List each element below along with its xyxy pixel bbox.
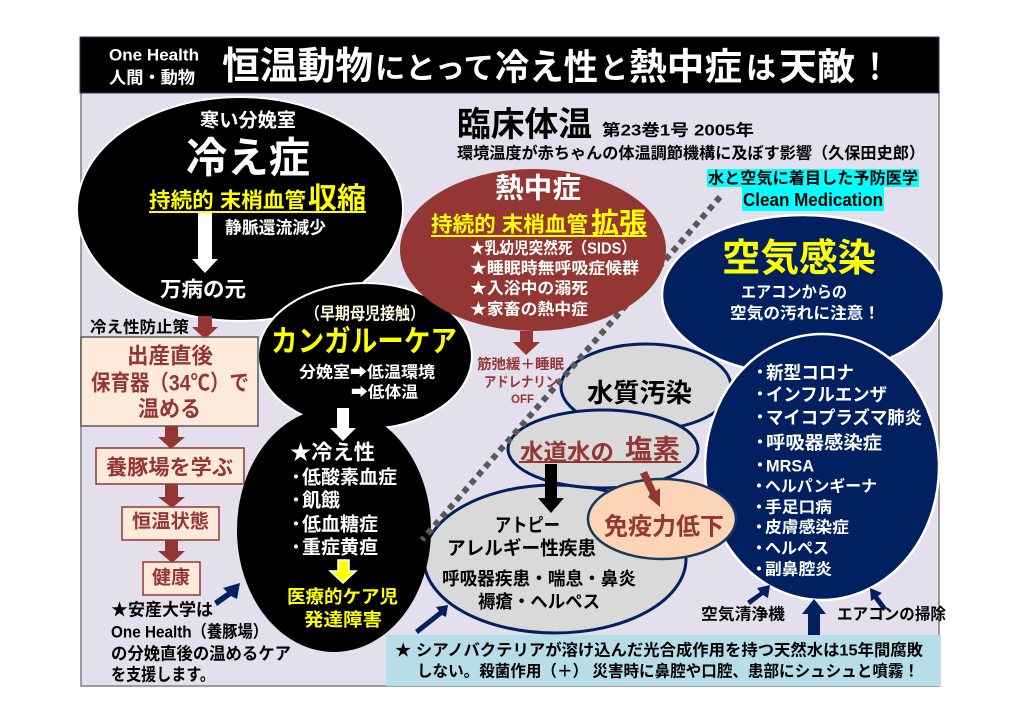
box: warm in incubator: 温める xyxy=(138,396,201,422)
label: preventive medicine: Clean Medication xyxy=(743,190,883,210)
panel: kangaroo care ellipse: ➡低体温 xyxy=(351,384,418,402)
panel: infectious disease list ellipse: ・ xyxy=(751,540,767,558)
panel: tap water chlorine ellipse: 塩素 xyxy=(625,435,680,465)
panel: cold-sensitivity symptoms ellipse: ・ xyxy=(288,540,304,556)
panel: allergy ellipse: 呼吸器疾患・喘息・鼻炎 xyxy=(442,568,636,589)
panel: airborne infection ellipse xyxy=(662,215,944,375)
panel: allergy ellipse: アレルギー性疾患 xyxy=(447,538,596,560)
panel: infectious disease list ellipse: ・ xyxy=(752,458,768,474)
text: muscle relaxation note: OFF xyxy=(511,392,534,406)
title bar: 人間・動物 xyxy=(109,68,195,88)
panel: allergy ellipse xyxy=(424,485,686,633)
panel: infectious disease list ellipse: ・ xyxy=(751,520,767,536)
heading: journal name: 臨床体温 xyxy=(457,106,592,144)
text: air conditioner cleaning label: エアコンの掃除 xyxy=(837,606,946,624)
panel: heat stroke ellipse: ★睡眠時無呼吸症候群 xyxy=(470,260,639,278)
panel: infectious disease list ellipse: 皮膚感染症 xyxy=(765,518,849,536)
panel: cold-sensitivity symptoms ellipse: 低血糖症 xyxy=(302,514,378,536)
panel: infectious disease list ellipse: インフルエンザ xyxy=(766,385,887,405)
text: Anzan University note: の分娩直後の温めるケア xyxy=(111,644,291,664)
panel: cold-sensitivity symptoms ellipse: ★冷え性 xyxy=(290,442,375,464)
panel: kangaroo care ellipse xyxy=(258,283,472,429)
box: homeothermic state: 恒温状態 xyxy=(132,510,209,532)
panel: water contamination ellipse xyxy=(561,344,731,430)
panel: allergy ellipse: 褥瘡・ヘルペス xyxy=(478,591,600,612)
panel: infectious disease list ellipse: ・ xyxy=(751,500,767,516)
panel: cold-sensitivity symptoms ellipse: 発達障害 xyxy=(304,610,382,630)
panel: infectious disease list ellipse xyxy=(705,334,939,600)
arrow: central up arrow xyxy=(802,599,826,636)
arrow: heat stroke down xyxy=(513,331,540,355)
panel: infectious disease list ellipse: マイコプラズマ肺炎 xyxy=(766,407,922,428)
panel: heat stroke ellipse: ★家畜の熱中症 xyxy=(470,300,588,318)
panel: tap water chlorine ellipse: 水道水の xyxy=(520,439,614,465)
text: air purifier label: 空気清浄機 xyxy=(701,604,785,624)
box: health xyxy=(143,562,200,595)
panel: cold-sensitivity symptoms ellipse: ・ xyxy=(288,516,304,534)
panel: infectious disease list ellipse: ・ xyxy=(751,562,767,578)
panel: infectious disease list ellipse: ・ xyxy=(752,364,768,382)
text: Anzan University note: ★安産大学は xyxy=(111,600,213,620)
title bar: にとって xyxy=(375,52,494,86)
text: Anzan University note: One Health（養豚場） xyxy=(111,622,268,642)
panel: infectious disease list ellipse: ・ xyxy=(752,386,768,404)
label: preventive medicine xyxy=(707,168,919,211)
panel: infectious disease list ellipse: 手足口病 xyxy=(765,498,832,516)
panel: cold disease ellipse: 冷え症 xyxy=(186,134,310,182)
box: homeothermic state xyxy=(122,507,219,540)
title bar: 天敵 xyxy=(779,46,855,88)
panel: cold disease ellipse: 持続的 末梢血管 xyxy=(149,190,306,212)
panel: lowered immunity ellipse: 免疫力低下 xyxy=(604,514,724,540)
panel: infectious disease list ellipse: 呼吸器感染症 xyxy=(766,432,882,453)
panel: heat stroke ellipse: 熱中症 xyxy=(495,172,581,204)
arrow: to allergy ellipse xyxy=(415,605,448,634)
panel: cold-sensitivity symptoms ellipse: 飢餓 xyxy=(302,488,340,512)
box: learn from pig farm xyxy=(96,448,244,484)
panel: infectious disease list ellipse: 新型コロナ xyxy=(766,363,854,383)
panel: cold disease ellipse: 収縮 xyxy=(308,182,366,215)
title bar: 熱中症 xyxy=(629,46,742,88)
panel: infectious disease list ellipse: ヘルパンギーナ xyxy=(765,478,877,496)
arrow: pig farm to homeothermy xyxy=(158,484,185,508)
panel: cold-sensitivity symptoms ellipse: 重症黄疸 xyxy=(302,536,378,558)
panel: airborne infection ellipse: エアコンからの xyxy=(741,284,847,302)
title bar: ！ xyxy=(860,46,890,88)
title bar xyxy=(80,37,939,93)
title bar: 冷え性 xyxy=(495,46,598,88)
text: cold prevention label: 冷え性防止策 xyxy=(90,318,189,336)
panel: cold disease ellipse xyxy=(77,97,403,321)
panel: heat stroke ellipse: 拡張 xyxy=(591,208,647,238)
panel: background xyxy=(81,92,939,686)
panel: cold-sensitivity symptoms ellipse xyxy=(237,408,431,652)
callout: cyanobacteria water: ★ シアノバクテリアが溶け込んだ光合成作用を持つ天然水は15年間腐敗 xyxy=(395,640,923,660)
panel: infectious disease list ellipse: ヘルペス xyxy=(765,540,829,558)
panel: infectious disease list ellipse: ・ xyxy=(752,410,768,426)
box: health: 健康 xyxy=(152,566,190,588)
panel: cold disease ellipse: 寒い分娩室 xyxy=(200,110,296,132)
panel: infectious disease list ellipse: MRSA xyxy=(766,456,814,476)
arrow: note to black ellipse xyxy=(214,583,240,606)
label: preventive medicine: 水と空気に着目した予防医学 xyxy=(708,168,918,188)
panel: infectious disease list ellipse: ・ xyxy=(752,434,768,452)
box: learn from pig farm: 養豚場を学ぶ xyxy=(106,456,233,480)
arrow: air conditioner cleaning xyxy=(870,588,887,611)
arrow: air purifier xyxy=(747,585,770,605)
panel: cold disease ellipse: 万病の元 xyxy=(160,278,246,302)
arrow: homeothermy to health xyxy=(158,540,185,563)
panel: lowered immunity ellipse xyxy=(588,479,736,559)
box: warm in incubator: 出産直後 xyxy=(127,344,213,368)
text: muscle relaxation note xyxy=(477,356,564,406)
panel: heat stroke ellipse: 持続的 末梢血管 xyxy=(431,214,588,236)
arrow: chlorine to immunity xyxy=(640,471,660,507)
panel: cold-sensitivity symptoms ellipse: 医療的ケア児 xyxy=(287,587,398,607)
callout: cyanobacteria water: しない。殺菌作用（＋） 災害時に鼻腔や口腔、患部にシュシュと噴霧！ xyxy=(417,662,919,680)
panel: heat stroke ellipse xyxy=(400,169,666,331)
panel: airborne infection ellipse: 空気感染 xyxy=(722,238,876,280)
title bar: は xyxy=(746,52,776,86)
panel: cold-sensitivity symptoms ellipse: ・ xyxy=(288,470,304,486)
panel: infectious disease list ellipse: ・ xyxy=(751,478,767,496)
panel: cold disease ellipse: 静脈還流減少 xyxy=(225,218,326,238)
title bar: と xyxy=(600,52,628,86)
text: Anzan University note xyxy=(111,600,291,684)
arrow: chlorine to allergy xyxy=(538,464,564,513)
panel: infectious disease list ellipse: 副鼻腔炎 xyxy=(765,560,832,578)
panel: heat stroke ellipse: ★入浴中の溺死 xyxy=(470,280,588,298)
title bar: One Health xyxy=(109,46,199,64)
arrow: incubator to pig farm xyxy=(158,426,185,449)
callout: cyanobacteria water xyxy=(386,635,941,686)
title bar: 恒温動物 xyxy=(222,46,373,88)
heading: journal name: 環境温度が赤ちゃんの体温調節機構に及ぼす影響（久保田史郎） xyxy=(457,144,925,162)
arrow: cold ellipse to box xyxy=(192,316,218,339)
heading: journal name: 第23巻1号 2005年 xyxy=(602,120,754,140)
divider: dotted diagonal line xyxy=(422,197,720,540)
panel: cold-sensitivity symptoms ellipse: 低酸素血症 xyxy=(302,466,397,488)
panel: heat stroke ellipse: ★乳幼児突然死（SIDS） xyxy=(470,238,636,258)
text: muscle relaxation note: 筋弛緩＋睡眠 xyxy=(477,356,564,372)
text: Anzan University note: を支援します。 xyxy=(111,664,215,684)
panel: cold-sensitivity symptoms ellipse: ・ xyxy=(288,492,304,510)
panel: tap water chlorine ellipse xyxy=(508,410,698,488)
panel: water contamination ellipse: 水質汚染 xyxy=(587,378,692,408)
panel: kangaroo care ellipse: 分娩室➡低温環境 xyxy=(299,364,435,382)
box: warm in incubator xyxy=(81,337,258,426)
heading: journal name xyxy=(457,106,925,162)
panel: allergy ellipse: アトピー xyxy=(495,514,560,536)
panel: airborne infection ellipse: 空気の汚れに注意！ xyxy=(730,304,880,322)
panel: kangaroo care ellipse: カンガルーケア xyxy=(271,326,457,358)
text: muscle relaxation note: アドレナリン xyxy=(484,374,558,390)
panel: kangaroo care ellipse: （早期母児接触） xyxy=(305,304,425,324)
box: warm in incubator: 保育器（34℃）で xyxy=(91,370,249,396)
